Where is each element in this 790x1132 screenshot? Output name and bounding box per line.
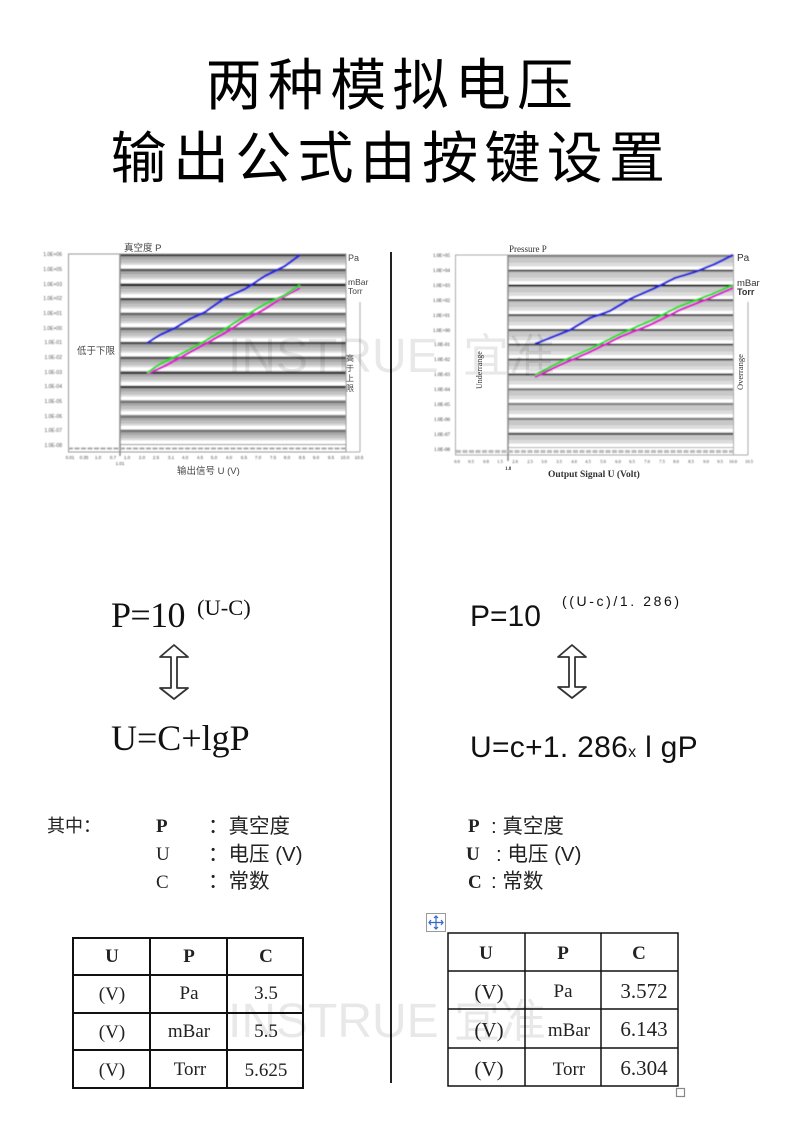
arrow: left double arrow bbox=[160, 645, 188, 699]
chart: vacuum output curve, Chinese: 1.01 bbox=[116, 461, 125, 466]
legend: right bbox=[466, 815, 581, 893]
chart: vacuum output curve, Chinese: 1.0E-06 bbox=[44, 414, 62, 420]
table: right constants: (V) bbox=[474, 1018, 504, 1042]
chart 1 labels: Pa bbox=[348, 253, 359, 263]
legend: left: ：真空度 bbox=[208, 815, 290, 838]
chart: vacuum output curve, Chinese: 1.0E+05 bbox=[43, 267, 62, 273]
title: 输出公式由按键设置 bbox=[111, 127, 671, 190]
legend: left bbox=[47, 815, 303, 893]
chart 1 labels: 上 bbox=[346, 374, 354, 383]
table: left constants: (V) bbox=[99, 984, 125, 1005]
chart: vacuum output curve, Chinese: 1.0E+06 bbox=[43, 252, 62, 258]
chart 2 labels: Pressure P bbox=[509, 244, 547, 254]
formula: right pressure: ((U-c)/1. 286) bbox=[562, 593, 682, 609]
chart: vacuum output curve, Chinese: 2.5 bbox=[153, 455, 160, 460]
formula: right voltage: U=c+1. 286x l gP bbox=[470, 731, 698, 764]
legend: left: 其中： bbox=[47, 816, 101, 836]
chart: vacuum output curve, English: 0.5 bbox=[468, 459, 475, 464]
watermark: lower: 宜准 bbox=[454, 995, 546, 1047]
legend: right: : 真空度 bbox=[491, 815, 564, 838]
chart: vacuum output curve, English: 7.0 bbox=[644, 459, 651, 464]
table: right constants: U bbox=[479, 943, 493, 964]
chart: vacuum output curve, Chinese: 1.0E+03 bbox=[43, 282, 62, 288]
legend: right: P bbox=[468, 816, 480, 837]
table: right constants: Torr bbox=[553, 1059, 586, 1080]
chart: vacuum output curve, Chinese: 4.0 bbox=[182, 455, 189, 460]
chart 2 labels: 1.8 bbox=[505, 467, 512, 472]
chart: vacuum output curve, Chinese: 1.0E-08 bbox=[44, 443, 62, 449]
chart 2 labels: Pa bbox=[737, 253, 750, 264]
chart: vacuum output curve, English: 1.0E+04 bbox=[433, 269, 450, 274]
table: right constants: C bbox=[632, 943, 646, 964]
chart: vacuum output curve, Chinese: 1.0E-02 bbox=[44, 355, 62, 361]
icon: table move handle bbox=[426, 914, 446, 932]
table: right constants: 6.304 bbox=[620, 1056, 668, 1080]
chart: vacuum output curve, English: 1.0E+00 bbox=[433, 329, 450, 334]
legend: right: : 电压 (V) bbox=[496, 843, 581, 866]
chart: vacuum output curve, Chinese: 9.0 bbox=[313, 455, 320, 460]
chart: vacuum output curve, English: 3.5 bbox=[556, 459, 563, 464]
chart: vacuum output curve, Chinese: 6.5 bbox=[241, 455, 248, 460]
legend: left: P bbox=[156, 816, 168, 837]
chart: vacuum output curve, English: 9.5 bbox=[717, 459, 724, 464]
chart: vacuum output curve, English: 1.0E-08 bbox=[434, 448, 450, 453]
legend: left: ：常数 bbox=[208, 870, 270, 893]
chart: vacuum output curve, English: 9.0 bbox=[703, 459, 710, 464]
chart: vacuum output curve, Chinese: 8.0 bbox=[284, 455, 291, 460]
chart: vacuum output curve, English: 1.0E-03 bbox=[434, 373, 450, 378]
title bbox=[111, 54, 671, 190]
chart 1 labels: 高 bbox=[346, 353, 354, 363]
chart: vacuum output curve, English: 1.0E-07 bbox=[434, 433, 450, 438]
chart: vacuum output curve, Chinese: 1.0 bbox=[95, 455, 102, 460]
formula: right pressure: P=10 bbox=[470, 600, 541, 633]
chart: vacuum output curve, English: 1.0E+02 bbox=[433, 299, 450, 304]
watermark: upper: 宜准 bbox=[463, 330, 555, 382]
legend: right: C bbox=[468, 872, 482, 893]
chart: vacuum output curve, Chinese: 4.5 bbox=[197, 455, 204, 460]
chart: vacuum output curve, English: 3.0 bbox=[541, 459, 548, 464]
chart: vacuum output curve, Chinese: 0.01 bbox=[66, 455, 75, 460]
table: left constants: (V) bbox=[99, 1022, 125, 1043]
icon: table resize handle bbox=[676, 1088, 684, 1096]
chart 1 labels: mBar bbox=[348, 277, 368, 287]
chart: vacuum output curve, English: 1.0E-01 bbox=[434, 343, 450, 348]
table: right constants: 3.572 bbox=[620, 979, 668, 1003]
table: left constants: 3.5 bbox=[254, 983, 278, 1004]
chart: vacuum output curve, English: 1.0E+05 bbox=[433, 254, 450, 259]
legend: left: U bbox=[156, 844, 170, 865]
chart: vacuum output curve, English: 2.5 bbox=[527, 459, 534, 464]
chart 1 labels: Torr bbox=[348, 286, 363, 296]
table: left constants bbox=[73, 938, 303, 1088]
formula: left pressure: (U-C) bbox=[197, 595, 251, 620]
chart 1 labels: 输出信号 U (V) bbox=[177, 465, 240, 477]
chart: vacuum output curve, Chinese: 1.0E-04 bbox=[44, 384, 62, 390]
chart: vacuum output curve, English: 1.0E-04 bbox=[434, 388, 450, 393]
chart: vacuum output curve, Chinese: 0.7 bbox=[110, 455, 117, 460]
watermark: upper: INSTRUE bbox=[228, 330, 439, 383]
table: left constants: 5.5 bbox=[254, 1021, 278, 1042]
chart 2 labels: mBar bbox=[737, 278, 760, 289]
chart: vacuum output curve, Chinese: 1.0E-05 bbox=[44, 399, 62, 405]
chart: vacuum output curve, Chinese: 1.0E-07 bbox=[44, 428, 62, 434]
chart: vacuum output curve, English: 0.8 bbox=[483, 459, 490, 464]
chart: vacuum output curve, Chinese: 2.0 bbox=[139, 455, 146, 460]
chart 2 labels: Output Signal U (Volt) bbox=[548, 469, 640, 480]
table: right constants: Pa bbox=[554, 981, 573, 1002]
formula: left pressure bbox=[111, 595, 251, 635]
chart: vacuum output curve, English: 8.5 bbox=[688, 459, 695, 464]
chart: vacuum output curve, Chinese: 0.35 bbox=[80, 455, 89, 460]
chart: vacuum output curve, English: 10.5 bbox=[745, 459, 754, 464]
chart: vacuum output curve, Chinese: 5.0 bbox=[211, 455, 218, 460]
formula: left voltage: U=C+lgP bbox=[111, 718, 250, 758]
chart: vacuum output curve, Chinese: 8.5 bbox=[299, 455, 306, 460]
chart 2 labels bbox=[475, 244, 760, 480]
chart 2 labels: Overrange bbox=[735, 354, 745, 390]
formula: left pressure: P=10 bbox=[111, 595, 185, 635]
chart: vacuum output curve, Chinese bbox=[43, 252, 364, 466]
chart: vacuum output curve, Chinese: 7.0 bbox=[255, 455, 262, 460]
table: left constants: (V) bbox=[99, 1060, 125, 1081]
chart: vacuum output curve, English: 2.0 bbox=[512, 459, 519, 464]
watermark: lower: INSTRUE bbox=[228, 995, 439, 1048]
table: left constants: 5.625 bbox=[245, 1060, 287, 1081]
table: right constants: P bbox=[557, 943, 569, 964]
table: left constants: Torr bbox=[174, 1059, 207, 1080]
title: 两种模拟电压 bbox=[206, 54, 579, 117]
chart: vacuum output curve, English: 1.0E-02 bbox=[434, 358, 450, 363]
chart: vacuum output curve, English: 10.0 bbox=[729, 459, 738, 464]
table: right constants: (V) bbox=[474, 980, 504, 1004]
chart: vacuum output curve, English: 7.5 bbox=[659, 459, 666, 464]
table: left constants: Pa bbox=[180, 983, 199, 1004]
table: right constants: mBar bbox=[548, 1020, 591, 1041]
chart: vacuum output curve, Chinese: 1.0E+02 bbox=[43, 296, 62, 302]
chart: vacuum output curve, English: 4.0 bbox=[571, 459, 578, 464]
chart: vacuum output curve, Chinese: 1.0E-03 bbox=[44, 370, 62, 376]
table: right constants: (V) bbox=[474, 1057, 504, 1081]
arrow: right double arrow bbox=[558, 645, 586, 698]
chart: vacuum output curve, Chinese: 10.0 bbox=[341, 455, 350, 460]
table: right constants bbox=[448, 933, 678, 1086]
chart 1 labels bbox=[77, 242, 368, 477]
table: left constants: P bbox=[183, 946, 195, 967]
chart: vacuum output curve, Chinese: 3.1 bbox=[168, 455, 175, 460]
chart 1 labels: 低于下限 bbox=[77, 345, 116, 357]
chart: vacuum output curve, Chinese: 7.5 bbox=[270, 455, 277, 460]
chart: vacuum output curve, Chinese: 9.5 bbox=[328, 455, 335, 460]
chart 1 labels: 真空度 P bbox=[124, 242, 161, 254]
chart: vacuum output curve, English: 8.0 bbox=[673, 459, 680, 464]
chart: vacuum output curve, English: 1.0E+03 bbox=[433, 284, 450, 289]
table: left constants: C bbox=[259, 946, 273, 967]
table: left constants: mBar bbox=[168, 1021, 211, 1042]
chart: vacuum output curve, Chinese: 1.0 bbox=[124, 455, 131, 460]
legend: right: U bbox=[466, 844, 480, 865]
chart: vacuum output curve, English: 1.0E+01 bbox=[433, 314, 450, 319]
chart: vacuum output curve, English: 5.0 bbox=[600, 459, 607, 464]
chart 2 labels: Underrange bbox=[475, 351, 484, 389]
chart: vacuum output curve, English: 1.0E-06 bbox=[434, 418, 450, 423]
chart 1 labels: 于 bbox=[346, 364, 354, 373]
chart: vacuum output curve, Chinese: 1.0E+01 bbox=[43, 311, 62, 317]
chart: vacuum output curve, English bbox=[433, 254, 754, 464]
chart: vacuum output curve, Chinese: 1.0E+00 bbox=[43, 326, 62, 332]
legend: right: : 常数 bbox=[491, 870, 543, 893]
table: right constants: 6.143 bbox=[620, 1017, 668, 1041]
centre divider bbox=[390, 252, 392, 1083]
legend: left: C bbox=[156, 872, 169, 893]
chart 1 labels: 限 bbox=[346, 384, 354, 393]
formula: right pressure bbox=[470, 593, 682, 633]
chart: vacuum output curve, English: 6.5 bbox=[629, 459, 636, 464]
chart: vacuum output curve, English: 6.0 bbox=[615, 459, 622, 464]
chart: vacuum output curve, English: 1.0E-05 bbox=[434, 403, 450, 408]
legend: left: ：电压 (V) bbox=[208, 843, 303, 866]
chart: vacuum output curve, English: 4.5 bbox=[585, 459, 592, 464]
chart 2 labels: Torr bbox=[737, 287, 755, 297]
chart: vacuum output curve, English: 1.5 bbox=[497, 459, 504, 464]
chart: vacuum output curve, Chinese: 10.5 bbox=[355, 455, 364, 460]
chart: vacuum output curve, Chinese: 4.0 bbox=[226, 455, 233, 460]
chart: vacuum output curve, Chinese: 1.0E-01 bbox=[44, 340, 62, 346]
chart: vacuum output curve, English: 0.0 bbox=[454, 459, 461, 464]
table: left constants: U bbox=[105, 946, 119, 967]
